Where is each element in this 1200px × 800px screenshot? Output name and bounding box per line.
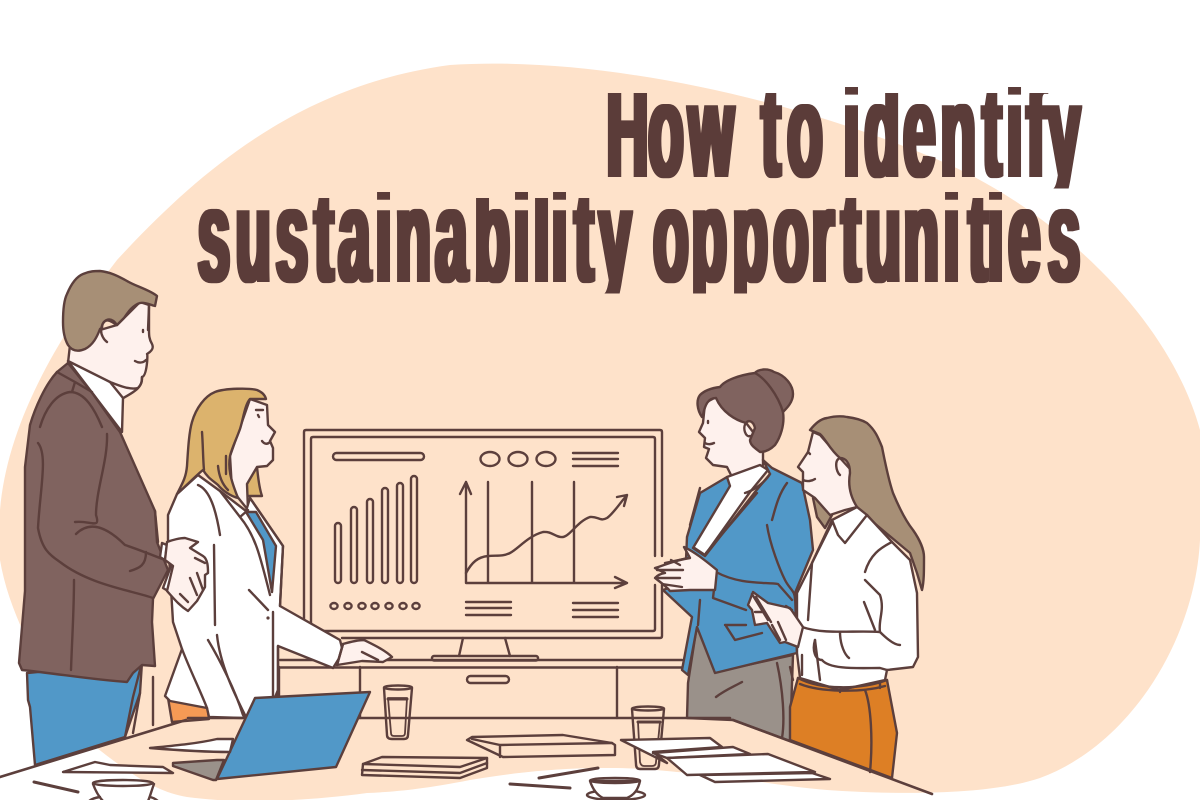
title [198,57,1080,309]
woman in white shirt [748,416,924,778]
man's hands [165,538,208,611]
blonde hair front [177,389,266,498]
monitor stand [459,638,510,656]
blonde woman in white blazer [165,389,392,722]
pen left [34,782,78,792]
monitor and sideboard [153,430,682,725]
coffee cup left [88,780,159,800]
book [467,735,615,757]
blue top [246,512,276,592]
clasped hands [655,547,717,591]
papers on the right [621,738,830,782]
white shirt [797,507,918,690]
coffee cup right [587,778,645,800]
long hair [810,416,924,590]
woman in blue jacket [655,369,813,741]
legend lines [466,453,618,617]
title line one: How to identify [606,57,1080,204]
line chart [460,482,627,588]
conference table [0,686,932,800]
paper left on white [63,762,173,773]
hair with bun [698,369,793,452]
blue blazer [663,460,813,675]
hand with pen [748,592,803,647]
pens right [510,768,598,788]
white blazer [165,475,343,718]
header ellipses [480,452,556,466]
grey skirt [687,625,793,741]
face [230,399,275,510]
paper left on blob [150,739,233,752]
monitor title bar [333,453,424,460]
neck and face [699,395,763,480]
belt [798,678,887,692]
hand on desk [337,640,392,665]
bar chart dots [330,603,420,609]
stack of books [362,757,487,778]
orange trousers [168,698,209,722]
glass right [632,706,664,769]
blonde hair back [240,467,262,496]
laptop [173,692,370,780]
man in brown jacket [19,271,208,765]
back hair [813,498,832,528]
face [798,432,860,515]
glass left [384,686,412,739]
title line two: sustainability opportunities [198,162,1080,309]
orange trousers [790,678,897,778]
man's hair [63,271,157,351]
sideboard [153,660,682,725]
bar chart [335,476,417,583]
